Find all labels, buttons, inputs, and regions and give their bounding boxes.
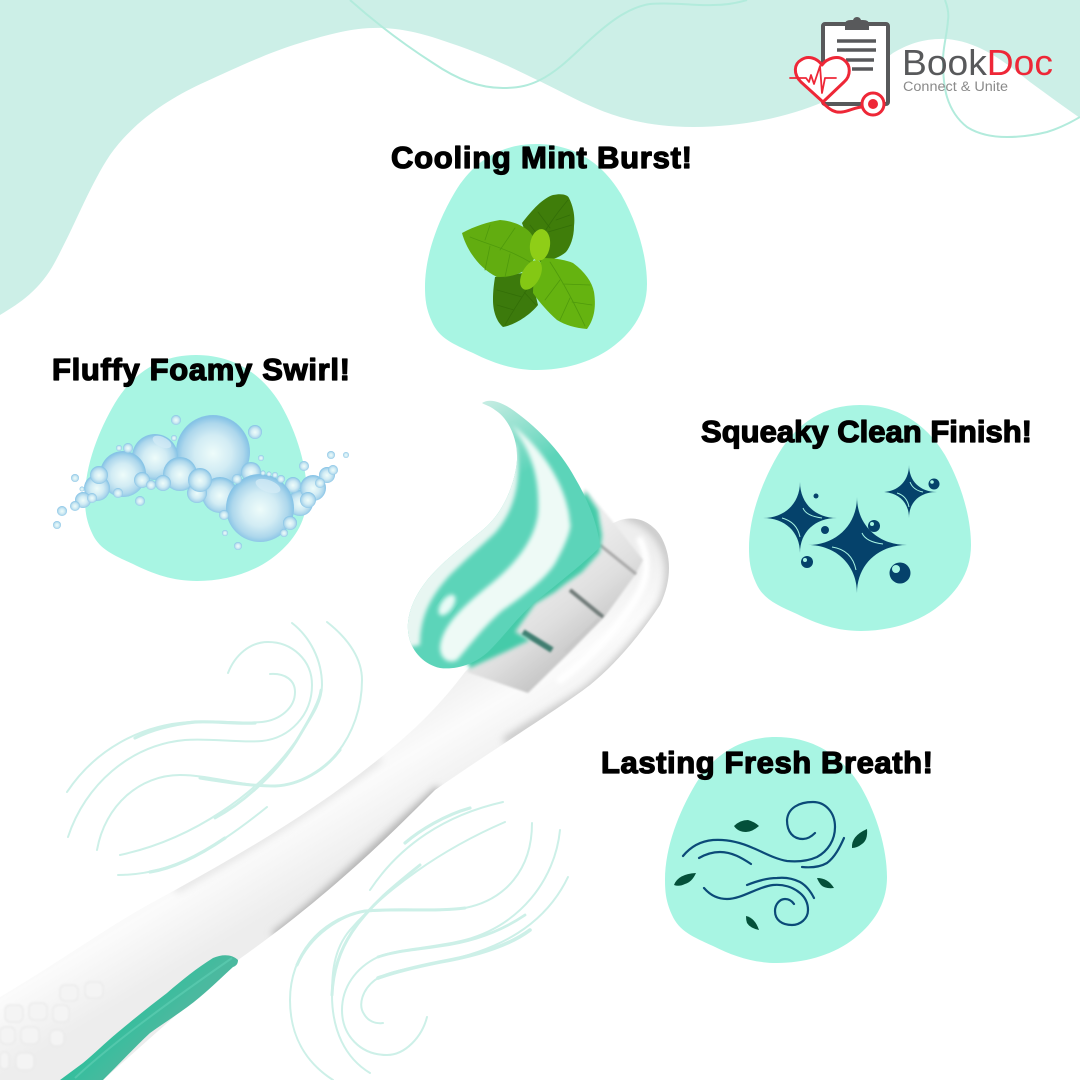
title: squeaky clean finish: Squeaky Clean Finish! xyxy=(701,414,1032,449)
decorative swirl right xyxy=(290,802,568,1080)
handle teal strip xyxy=(60,955,238,1080)
icon: mint leaves xyxy=(462,194,595,329)
icon: foam bubbles xyxy=(53,415,349,550)
background wave shape xyxy=(0,0,1080,315)
handle grip texture xyxy=(0,982,103,1070)
thin wave line top centre xyxy=(350,0,747,88)
title: lasting fresh breath: Lasting Fresh Breath! xyxy=(601,745,933,780)
logo heart and stethoscope xyxy=(790,58,884,115)
bristle paste fringe xyxy=(465,492,602,668)
logo: BookDoc xyxy=(790,17,1053,115)
paste white right band xyxy=(440,425,570,661)
logo clipboard xyxy=(823,17,888,104)
blob: clean xyxy=(749,405,971,631)
title: fluffy foamy swirl: Fluffy Foamy Swirl! xyxy=(52,352,350,387)
title: cooling mint burst: Cooling Mint Burst! xyxy=(391,140,692,175)
toothpaste dab xyxy=(395,401,602,668)
paste white left band xyxy=(395,440,518,650)
thin wave line top right xyxy=(943,0,1080,137)
icon: sparkles xyxy=(763,465,940,593)
bristle tufts xyxy=(467,488,643,693)
decorative swirl left xyxy=(67,622,362,875)
paste highlight xyxy=(435,592,459,618)
toothbrush xyxy=(0,401,670,1080)
blob: foam xyxy=(85,355,307,581)
icon: wind and leaves xyxy=(674,802,867,930)
handle and head xyxy=(0,518,669,1080)
blob: mint xyxy=(425,144,647,370)
logo wordmark: BookDoc xyxy=(902,42,1053,83)
blob: breath xyxy=(665,737,887,963)
logo tagline: Connect & Unite xyxy=(903,79,1008,94)
